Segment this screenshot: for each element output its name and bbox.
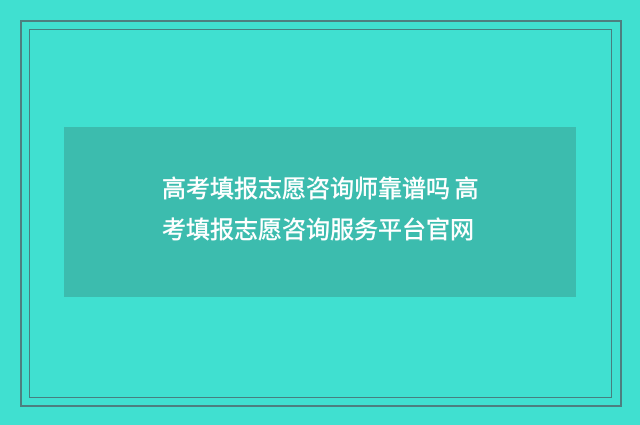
inner frame (29, 29, 612, 398)
title line 1: 高考填报志愿咨询师靠谱吗 高 (162, 176, 479, 203)
title line 2: 考填报志愿咨询服务平台官网 (162, 217, 474, 244)
panel: title band (64, 127, 576, 297)
